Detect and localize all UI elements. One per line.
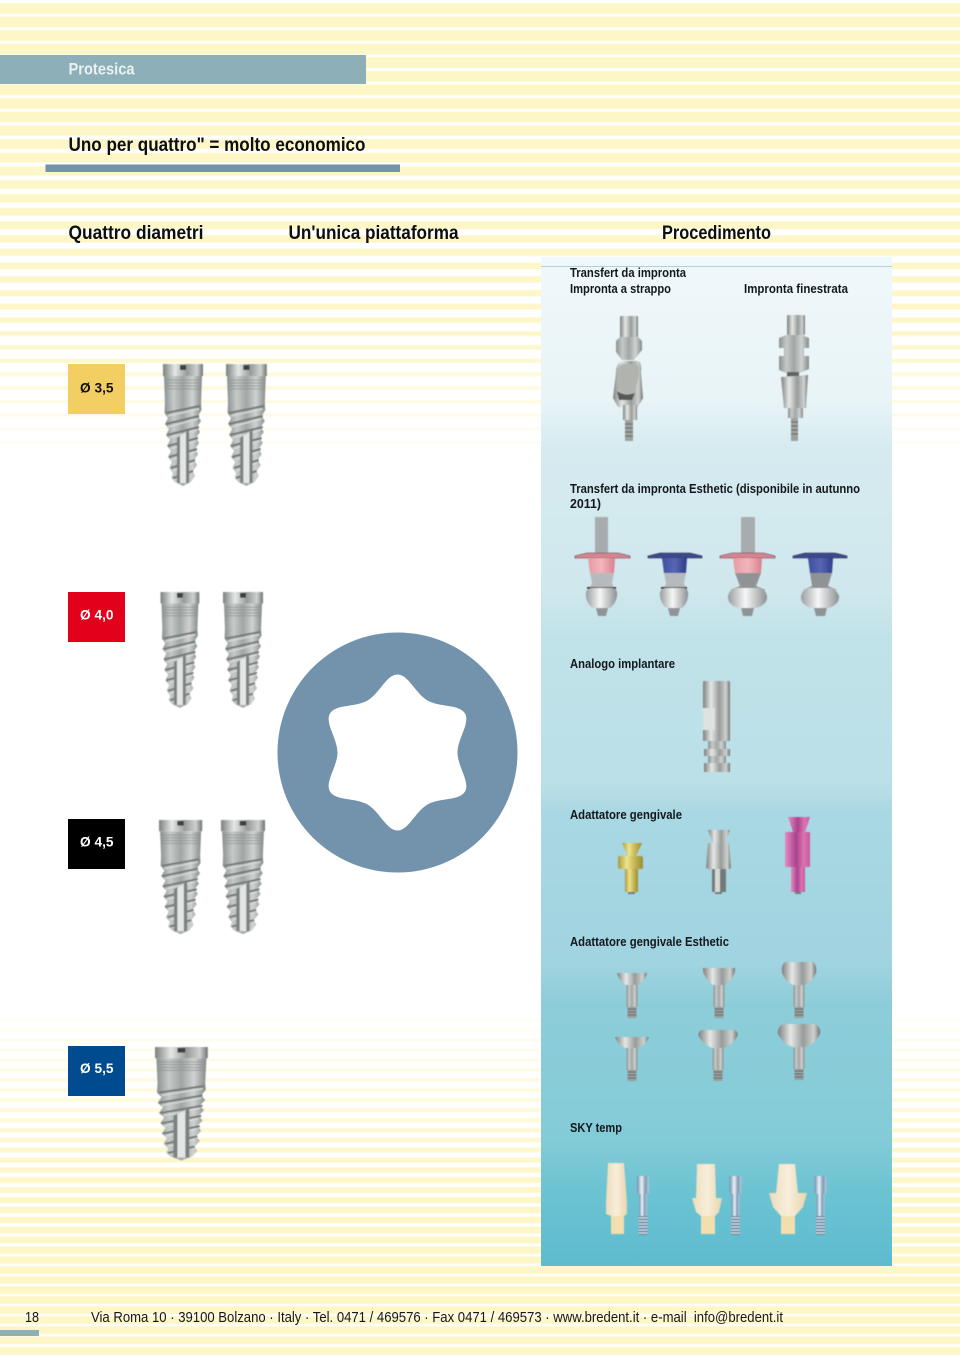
- implant 4,5 left: [159, 820, 202, 934]
- column heading: Quattro diametri: Quattro diametri: [68, 223, 204, 244]
- footer: page number: 18: [25, 1309, 39, 1326]
- label: adattatore gengivale: Adattatore gengivale: [570, 808, 682, 822]
- icon: sky temp abutment 2: [692, 1164, 742, 1235]
- diameter tag 4,0: Ø 4,0: [80, 608, 114, 622]
- footer: page number: [0, 1309, 39, 1336]
- title: [46, 135, 400, 172]
- icon: transfert esthetic pink wide: [720, 517, 775, 616]
- labels: transfert da impronta: Impronta a strappo: [570, 282, 671, 296]
- diameter tag 4,5: [68, 819, 125, 869]
- icon: esthetic healing abutment row 1 small: [617, 973, 647, 1018]
- label: transfert esthetic: [570, 482, 860, 511]
- labels: transfert da impronta: [570, 266, 849, 296]
- icon: transfert esthetic blue wide: [793, 553, 847, 616]
- icon: transfer impronta finestrata: [779, 315, 809, 441]
- icon: sky temp abutment 3: [769, 1164, 826, 1235]
- icon: esthetic healing abutment row 1 medium: [703, 968, 735, 1018]
- diameter tag 3,5: Ø 3,5: [80, 380, 114, 396]
- icon: esthetic healing abutment row 1 large: [782, 962, 816, 1018]
- implant 4,5 right: [221, 820, 265, 934]
- label: transfert esthetic: Transfert da impronta Esthetic (disponibile in autunno: [570, 482, 860, 496]
- diameter tag 4,5: Ø 4,5: [80, 834, 114, 850]
- icon: esthetic healing abutment row 2 medium: [698, 1030, 738, 1081]
- column heading: Procedimento: Procedimento: [662, 223, 771, 244]
- icon: adattatore gengivale silver: [706, 830, 731, 894]
- icon: adattatore gengivale pink: [785, 817, 810, 894]
- implant 3,5 right: [226, 364, 267, 486]
- icon: transfert esthetic pink narrow: [575, 517, 630, 616]
- panel: procedimento: [541, 257, 892, 1266]
- diameter tag 5,5: [68, 1046, 125, 1096]
- section banner: Protesica: [0, 55, 366, 84]
- icon: esthetic healing abutment row 2 large: [778, 1024, 820, 1080]
- footer: address: Via Roma 10 · 39100 Bolzano · Italy · Tel. 0471 / 469576 · Fax 0471 / 469573 · www.bredent.it · e-mail info@bredent.it: [91, 1309, 784, 1326]
- implant 4,0 left: [160, 592, 199, 708]
- implant 5,5: [155, 1047, 208, 1160]
- title: Uno per quattro" = molto economico: [68, 135, 366, 156]
- icon: transfert esthetic blue narrow: [648, 553, 702, 616]
- icon: analogo implantare: [703, 681, 730, 772]
- icon: sky temp abutment 1: [606, 1163, 649, 1235]
- label: analogo implantare: Analogo implantare: [570, 657, 675, 671]
- icon: adattatore gengivale gold: [618, 843, 643, 894]
- icon: esthetic healing abutment row 2 small: [615, 1037, 649, 1081]
- platform diagram: hexalobular connection: [278, 632, 518, 872]
- label: sky temp: SKY temp: [570, 1121, 622, 1135]
- diameter tag 5,5: Ø 5,5: [80, 1061, 114, 1076]
- diameter tag 3,5: [68, 364, 125, 414]
- label: adattatore gengivale esthetic: Adattatore gengivale Esthetic: [570, 935, 729, 949]
- column heading: Un'unica piattaforma: Un'unica piattaforma: [288, 223, 459, 244]
- section banner: Protesica: Protesica: [68, 60, 135, 78]
- diameter tag 4,0: [68, 592, 125, 642]
- label: transfert esthetic: 2011): [570, 497, 601, 511]
- implant 3,5 left: [163, 364, 203, 486]
- labels: transfert da impronta: Impronta finestrata: [744, 282, 849, 296]
- icon: transfer impronta a strappo: [613, 316, 643, 441]
- implant 4,0 right: [223, 592, 263, 708]
- labels: transfert da impronta: Transfert da impronta: [570, 266, 687, 280]
